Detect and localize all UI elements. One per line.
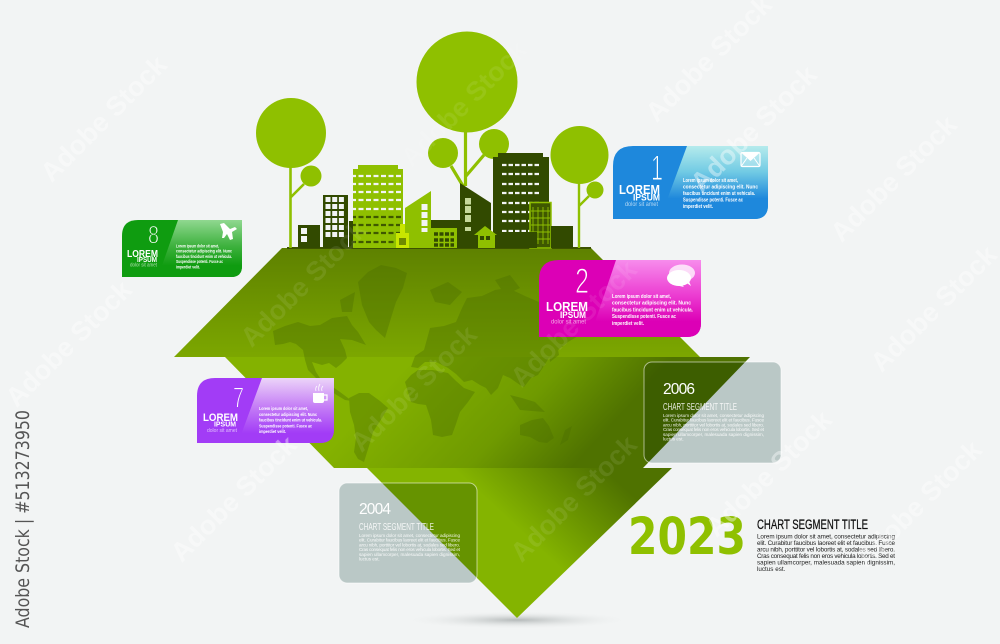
card 7 heading: IPSUM	[214, 420, 236, 428]
year 2023: 2023	[628, 508, 746, 567]
city skyline	[298, 153, 573, 248]
card 2 body: faucibus tincidunt enim ut vehicula.	[612, 308, 693, 314]
2023 body: Cras consequat felis non eros vehicula lobortis. Sed et	[757, 553, 895, 560]
2006 title: CHART SEGMENT TITLE	[663, 401, 737, 413]
card 7 body: faucibus tincidunt enim ut vehicula.	[259, 418, 322, 424]
card 7 number: 7	[233, 382, 244, 414]
icon: chat bubbles	[667, 264, 695, 287]
building: pointed dark	[460, 183, 491, 248]
stock watermark over background: Adobe Stock	[700, 404, 838, 543]
2006 body: luctus est.	[663, 436, 684, 442]
building: low dark front	[495, 232, 537, 248]
card 8 body: Suspendisse potenti. Fusce ac	[176, 259, 223, 265]
card 8 body: Lorem ipsum dolor sit amet,	[176, 244, 219, 250]
2023 body	[757, 534, 895, 573]
card 1 body: Lorem ipsum dolor sit amet,	[683, 178, 738, 184]
glass card: 2004	[339, 483, 477, 583]
house	[474, 226, 497, 248]
2004 body: elit. Curabitur faucibus laoreet elit et faucibus. Fusce	[359, 538, 460, 543]
pyramid middle segment	[225, 357, 750, 468]
stock watermark over background: Adobe Stock	[825, 109, 963, 248]
card 7 body: Suspendisse potenti. Fusce ac	[259, 424, 312, 430]
card 2 body: imperdiet velit.	[612, 321, 644, 327]
building: dark tall tower	[493, 153, 549, 248]
card 8 body	[176, 244, 232, 270]
building: pointed green	[405, 191, 431, 248]
card 8 heading: dolor sit amet	[130, 262, 158, 268]
card 1 body: Suspendisse potenti. Fusce ac	[683, 198, 743, 204]
card 1: blue	[613, 146, 768, 219]
stock watermark over artwork: Adobe Stock	[345, 319, 483, 458]
pyramid top segment	[174, 248, 700, 357]
2004 body: luctus est.	[359, 556, 380, 562]
card 1 heading: LOREM	[619, 182, 660, 197]
stock watermark over background: Adobe Stock	[0, 274, 138, 413]
stock watermark over artwork: Adobe Stock	[505, 254, 643, 393]
apex shadow	[402, 611, 632, 629]
building: green grid front	[530, 202, 551, 248]
2023 body: elit. Curabitur faucibus laoreet elit et faucibus. Fusce	[757, 540, 895, 547]
2004 title: CHART SEGMENT TITLE	[359, 521, 434, 533]
card 7 body	[259, 406, 322, 435]
card 8 body: imperdiet velit.	[176, 264, 200, 270]
stock watermark over artwork	[235, 34, 643, 568]
card 1 body: faucibus tincidunt enim ut vehicula.	[683, 191, 755, 197]
2023 title: CHART SEGMENT TITLE	[757, 517, 868, 532]
2023 body: sapien ullamcorper, malesuada sapien dignissim,	[757, 560, 895, 566]
card 8: green	[122, 220, 242, 277]
building: low dark and green grid	[431, 220, 460, 248]
card 1 heading: dolor sit amet	[625, 201, 658, 208]
icon: envelope	[741, 152, 760, 166]
card 2 body: consectetur adipiscing elit. Nunc	[612, 300, 691, 306]
building: right low dark	[551, 226, 573, 248]
2006 body: arcu nibh, porttitor vel lobortis at, sodales sed libero.	[663, 422, 764, 427]
2006 body: elit. Curabitur faucibus laoreet elit et faucibus. Fusce	[663, 418, 764, 423]
card 8 body: consectetur adipiscing elit. Nunc	[176, 248, 232, 254]
glass card: 2006	[644, 362, 781, 463]
card 2 body	[612, 294, 693, 327]
ground strip	[287, 247, 591, 249]
card 2 body: Suspendisse potenti. Fusce ac	[612, 314, 676, 320]
card 1 body: imperdiet velit.	[683, 204, 713, 210]
card 7 heading: dolor sit amet	[207, 428, 237, 434]
card 8 heading	[127, 249, 158, 268]
2023 body: arcu nibh, porttitor vel lobortis at, sodales sed libero.	[757, 546, 895, 554]
stock watermark over artwork: Adobe Stock	[235, 214, 373, 353]
2006 body: Lorem ipsum dolor sit amet, consectetur adipiscing	[663, 413, 764, 418]
card 1 body	[683, 178, 758, 210]
icon: coffee cup	[313, 384, 327, 403]
card 8 number: 8	[148, 222, 159, 250]
card 7 heading: LOREM	[203, 412, 238, 424]
2004 body: Lorem ipsum dolor sit amet, consectetur adipiscing	[359, 533, 460, 538]
stock watermark over background: Adobe Stock	[685, 59, 823, 198]
2006 year: 2006	[663, 381, 695, 398]
card 2 heading: dolor sit amet	[551, 318, 586, 326]
2004 year: 2004	[359, 501, 391, 518]
stock watermark over artwork: Adobe Stock	[505, 429, 643, 568]
card 2 number: 2	[575, 262, 589, 301]
card 2 heading: LOREM	[546, 299, 588, 314]
card 7 body: consectetur adipiscing elit. Nunc	[259, 412, 317, 418]
card 1 heading: IPSUM	[633, 192, 660, 202]
building: dark grid tower	[323, 195, 354, 248]
card 8 heading: LOREM	[127, 249, 158, 260]
trees	[256, 32, 608, 248]
tree: right	[550, 126, 608, 248]
tree: left	[256, 98, 326, 248]
card 7 body: Lorem ipsum dolor sit amet,	[259, 406, 308, 412]
stock watermark over background: Adobe Stock	[165, 429, 303, 568]
card 8 heading: IPSUM	[137, 257, 157, 264]
2004 body	[359, 533, 461, 562]
building: green tower	[353, 165, 403, 248]
2004 body: arcu nibh, porttitor vel lobortis at, sodales sed libero.	[359, 542, 460, 547]
2004 body: sapien ullamcorper, malesuada sapien dignissim,	[359, 552, 460, 557]
card 2 body: Lorem ipsum dolor sit amet,	[612, 294, 671, 300]
2023 body: luctus est.	[757, 566, 786, 573]
2004 body: Cras consequat felis non eros vehicula lobortis. Sed et	[359, 547, 461, 552]
2023 block	[757, 517, 895, 573]
tree: large centre	[416, 32, 518, 186]
2023 body: Lorem ipsum dolor sit amet, consectetur adipiscing	[757, 534, 895, 540]
card 1 heading	[619, 182, 660, 208]
card 2 heading	[546, 299, 588, 326]
card 7: purple	[197, 378, 334, 443]
building: low dark left	[298, 225, 320, 248]
card 1 body: consectetur adipiscing elit. Nunc	[683, 184, 758, 190]
card 8 body: faucibus tincidunt enim ut vehicula.	[176, 254, 232, 260]
card 2 heading: IPSUM	[560, 310, 586, 320]
stock watermark over background: Adobe Stock	[865, 239, 1000, 378]
stock watermark over artwork: Adobe Stock	[395, 34, 533, 173]
card 2: magenta	[539, 260, 701, 337]
stock watermark over background: Adobe Stock	[850, 434, 988, 573]
world map	[273, 265, 595, 462]
building: lime small	[396, 224, 409, 248]
stock watermark over background: Adobe Stock	[35, 49, 173, 188]
2006 body	[663, 413, 765, 442]
card 7 heading	[203, 412, 238, 434]
pyramid bottom segment	[367, 468, 672, 618]
2006 body: sapien ullamcorper, malesuada sapien dignissim,	[663, 432, 764, 437]
vertical stock id: Adobe Stock | #513273950	[12, 410, 34, 628]
card 1 number: 1	[651, 149, 663, 188]
card 7 body: imperdiet velit.	[259, 429, 286, 435]
2006 body: Cras consequat felis non eros vehicula lobortis. Sed et	[663, 427, 765, 432]
icon: airplane	[220, 223, 237, 240]
